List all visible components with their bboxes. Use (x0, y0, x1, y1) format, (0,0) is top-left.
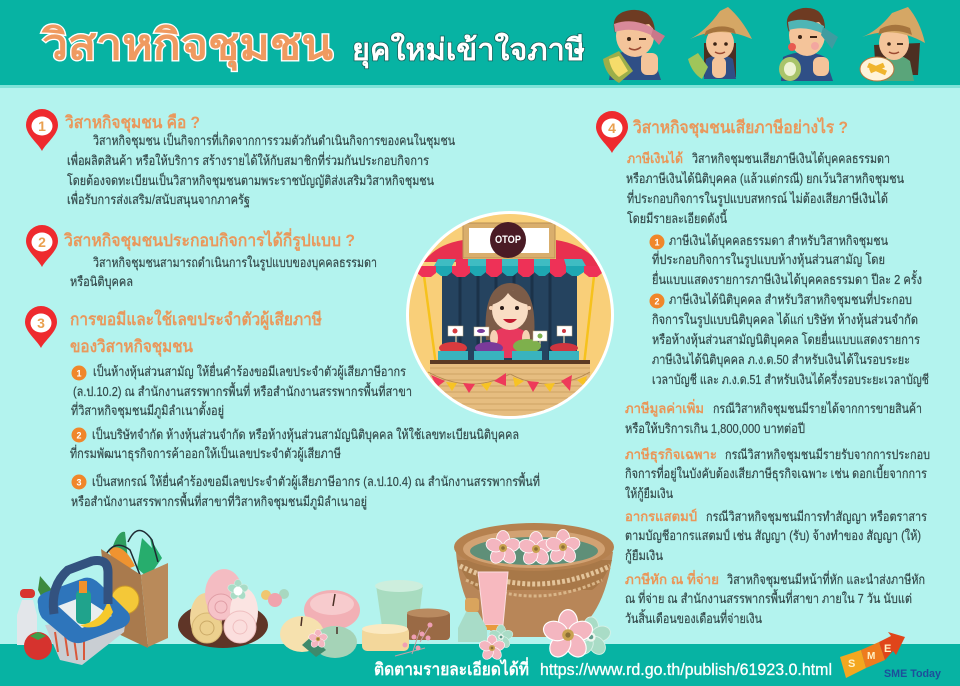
character: woman with straw hat and mango sticky rice (860, 7, 925, 81)
illustration: basket (38, 560, 130, 665)
title: วิสาหกิจชุมชน (40, 21, 333, 71)
income tax block: วิสาหกิจชุมชนเสียภาษีเงินได้บุคคลธรรมดา (691, 151, 890, 167)
withholding tax block: ภาษีหัก ณ ที่จ่าย (625, 569, 719, 587)
heading 3 (70, 309, 322, 357)
item 4.1: ที่ประกอบกิจการในรูปแบบห้างหุ้นส่วนสามัญ โดย (652, 251, 885, 268)
item 4.1: 1 (654, 238, 660, 248)
illustration: small flower cluster (261, 589, 289, 607)
item 3.1: (ล.ป.10.2) ณ สำนักงานสรรพากรพื้นที่ หรือสำนักงานสรรพากรพื้นที่สาขา (73, 382, 412, 399)
SME Today logo: SME Today (884, 668, 942, 680)
illustration: milk bottle (17, 589, 37, 645)
pin 2 (26, 225, 58, 267)
OTOP logo: OTOP (495, 234, 521, 246)
VAT block: ภาษีมูลค่าเพิ่ม (625, 398, 704, 417)
item 3.2 (70, 425, 519, 462)
produce baskets (438, 326, 579, 362)
item 4.1: ภาษีเงินได้บุคคลธรรมดา สำหรับวิสาหกิจชุมชน (669, 233, 888, 249)
item 4.1 (650, 233, 922, 288)
pin 4 (596, 111, 628, 153)
pin 1: 1 (38, 118, 46, 134)
withholding tax block: วันสิ้นเดือนของเดือนที่จ่ายเงิน (625, 609, 762, 626)
footer text: https://www.rd.go.th/publish/61923.0.html (540, 661, 832, 679)
SME Today logo: E (884, 643, 891, 655)
item 3.2: เป็นบริษัทจำกัด ห้างหุ้นส่วนจำกัด หรือห้างหุ้นส่วนสามัญนิติบุคคล ให้ใช้เลขทะเบียนนิติบุคคล (92, 425, 519, 443)
stamp duty block: อากรแสตมป์ (625, 508, 697, 524)
illustration: tomato (24, 632, 52, 660)
item 3.1 (71, 362, 412, 419)
stamp duty block: กู้ยืมเงิน (625, 548, 663, 564)
illustration: OTOP market stall (406, 211, 614, 422)
heading 4: วิสาหกิจชุมชนเสียภาษีอย่างไร ? (633, 117, 848, 138)
SME Today logo: M (867, 651, 875, 662)
counter with bunting (428, 360, 590, 422)
body 1 (67, 131, 455, 208)
subtitle: ยุคใหม่เข้าใจภาษี (352, 32, 585, 69)
illustration: cosmetics jars (362, 580, 450, 656)
body 1: วิสาหกิจชุมชน เป็นกิจการที่เกิดจากการรวมตัวกันดำเนินกิจการของคนในชุมชน (92, 131, 455, 149)
illustration: clay bowl with flowers (454, 523, 614, 637)
illustration: pink tube and bottle (458, 572, 508, 642)
footer text (374, 657, 832, 679)
heading 3: ของวิสาหกิจชุมชน (70, 337, 193, 357)
item 3.3 (71, 472, 540, 510)
shopkeeper woman (486, 283, 534, 358)
VAT block (625, 398, 922, 436)
illustration: shopping bag (101, 530, 168, 648)
item 3.1: เป็นห้างหุ้นส่วนสามัญ ให้ยื่นคำร้องขอมีเลขประจำตัวผู้เสียภาษีอากร (93, 362, 406, 380)
item 3.2: ที่กรมพัฒนาธุรกิจการค้าออกให้เป็นเลขประจำตัวผู้เสียภาษี (70, 444, 341, 462)
item 3.1: ที่วิสาหกิจชุมชนมีภูมิลำเนาตั้งอยู่ (71, 401, 224, 419)
illustration: foreground flowers (478, 610, 612, 661)
SME Today logo: S (848, 658, 855, 670)
item 3.3: หรือสำนักงานสรรพากรพื้นที่สาขาที่วิสาหกิจชุมชนมีภูมิลำเนาอยู่ (71, 492, 367, 510)
item 3.1: 1 (76, 368, 82, 378)
VAT block: หรือให้บริการเกิน 1,800,000 บาทต่อปี (625, 421, 805, 436)
header band (0, 0, 960, 88)
pin 4: 4 (608, 120, 616, 136)
item 4.2: 2 (654, 296, 660, 306)
heading 1: วิสาหกิจชุมชน คือ ? (65, 112, 200, 133)
withholding tax block: วิสาหกิจชุมชนมีหน้าที่หัก และนำส่งภาษีหัก (726, 571, 925, 588)
item 4.2: หรือห้างหุ้นส่วนสามัญนิติบุคคล โดยยื่นแบบแสดงรายการ (652, 331, 920, 348)
body 1: เพื่อรับการส่งเสริม/สนับสนุนจากภาครัฐ (67, 191, 250, 208)
section 3 (25, 306, 540, 510)
income tax block: หรือภาษีเงินได้นิติบุคคล (แล้วแต่กรณี) ยกเว้นวิสาหกิจชุมชน (626, 171, 904, 187)
section 1 (26, 109, 455, 208)
withholding tax block (625, 569, 925, 626)
illustration: fruit soaps (280, 590, 360, 658)
section 4 (596, 111, 930, 626)
income tax block (626, 150, 904, 226)
pin 3 (25, 306, 57, 348)
heading 3: การขอมีและใช้เลขประจำตัวผู้เสียภาษี (70, 309, 322, 331)
item 4.2: ภาษีเงินได้นิติบุคคล ภ.ง.ด.50 สำหรับเงินได้ในรอบระยะ (652, 352, 910, 368)
pin 1 (26, 109, 58, 151)
character: man with blue headband eating (779, 8, 838, 81)
body 2 (70, 255, 377, 290)
footer band (0, 644, 960, 686)
item 3.3: เป็นสหกรณ์ ให้ยื่นคำร้องขอมีเลขประจำตัวผู้เสียภาษีอากร (ล.ป.10.4) ณ สำนักงานสรรพากรพื้นที่ (92, 472, 540, 490)
item 3.3: 3 (76, 478, 82, 488)
item 4.2: ภาษีเงินได้นิติบุคคล สำหรับวิสาหกิจชุมชนที่ประกอบ (669, 291, 912, 308)
income tax block: ภาษีเงินได้ (627, 150, 683, 166)
body 1: เพื่อผลิตสินค้า หรือให้บริการ สร้างรายได้ให้กับสมาชิกที่ร่วมกันประกอบกิจการ (67, 152, 429, 168)
footer text: ติดตามรายละเอียดได้ที่ (374, 657, 529, 679)
pin 3: 3 (37, 315, 45, 331)
withholding tax block: ณ ที่จ่าย ณ สำนักงานสรรพากรพื้นที่สาขา ภายใน 7 วัน นับแต่ (625, 589, 912, 606)
SME Today logo (840, 632, 942, 680)
income tax block: ที่ประกอบกิจการในรูปแบบสหกรณ์ ไม่ต้องเสียภาษีเงินได้ (627, 190, 888, 207)
specific business tax block: ให้กู้ยืมเงิน (625, 486, 673, 502)
body 2: วิสาหกิจชุมชนสามารถดำเนินการในรูปแบบของบุคคลธรรมดา (92, 255, 377, 271)
body 1: โดยต้องจดทะเบียนเป็นวิสาหกิจชุมชนตามพระราชบัญญัติส่งเสริมวิสาหกิจชุมชน (67, 171, 434, 189)
item 4.2: กิจการในรูปแบบนิติบุคคล ได้แก่ บริษัท ห้างหุ้นส่วนจำกัด (652, 312, 918, 328)
specific business tax block (625, 447, 930, 502)
income tax block: โดยมีรายละเอียดดังนี้ (627, 209, 727, 226)
OTOP logo (490, 222, 526, 258)
section 2 (26, 225, 377, 290)
stamp duty block (625, 508, 927, 564)
item 3.2: 2 (76, 430, 82, 440)
body 2: หรือนิติบุคคล (70, 274, 133, 290)
pin 2: 2 (38, 234, 46, 250)
item 4.2 (650, 291, 929, 387)
character: man with pink headband and durian (603, 10, 665, 83)
character: woman with straw hat and mango (688, 7, 752, 79)
specific business tax block: ภาษีธุรกิจเฉพาะ (625, 447, 717, 463)
illustration: towels on a plate (178, 569, 268, 648)
heading 2: วิสาหกิจชุมชนประกอบกิจการได้กี่รูปแบบ ? (64, 228, 355, 252)
